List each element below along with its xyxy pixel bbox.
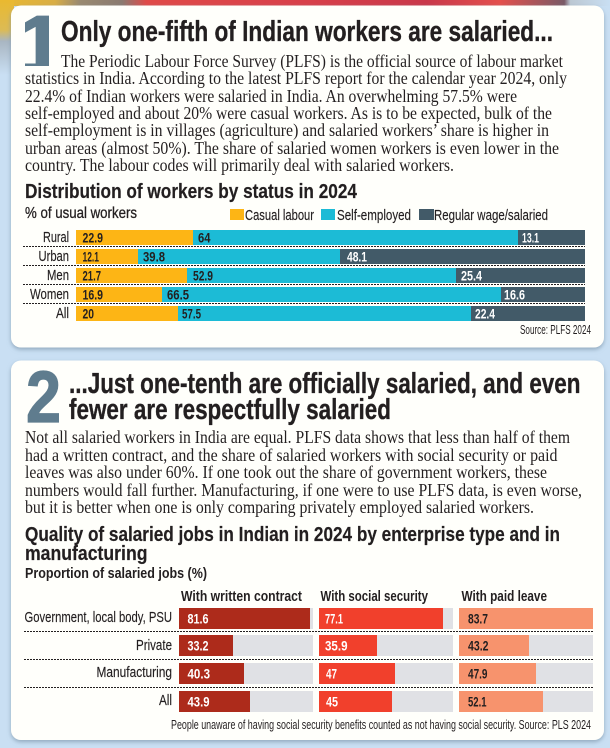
chart title 2 [25,523,560,565]
row: Urban: 48.1 [347,248,367,264]
row: Government, local body, PSU: 77.1 [325,610,343,626]
row: Private: 33.2 [188,638,209,654]
heading 2 [69,368,580,426]
row: Rural [43,229,585,246]
row: Rural: 64 [198,230,211,246]
row: Women [30,286,585,303]
intro text 1 [25,51,567,175]
row: Manufacturing: 47 [326,666,337,682]
row: Women: Women [30,286,69,303]
row: Rural: 22.9 [82,230,103,246]
heading 2: fewer are respectfully salaried [69,394,391,426]
row: All: All [56,305,69,322]
row: Manufacturing [96,663,593,684]
row: Men: Men [47,267,69,284]
row: All: 57.5 [182,306,201,322]
row: Men: 52.9 [193,268,213,284]
bar chart: column headings: With written contract [181,588,302,605]
intro text 1: 22.4% of Indian workers were salaried in India. An overwhelming 57.5% were [25,86,517,106]
intro text 2 [25,427,582,517]
row: All: 20 [82,306,94,322]
row: Rural: 13.1 [522,230,539,246]
chart subtitle 1: % of usual workers [25,205,137,222]
row: Rural: Rural [43,229,69,246]
intro text 2: leaves was also under 60%. If one took out the share of government workers, these [25,462,547,482]
row: Urban [38,248,585,265]
intro text 1: country. The labour codes will primarily deal with salaried workers. [25,155,454,175]
bar chart: column headings [181,588,547,605]
panel 1 card [11,6,604,348]
bar chart: job quality [24,608,593,712]
row: All [159,691,593,712]
row: Private: 35.9 [325,638,348,654]
row: All: 22.4 [475,306,495,322]
row: Manufacturing: 40.3 [188,666,210,682]
intro text 1: self-employment is in villages (agriculture) and salaried workers’ share is higher in [25,120,549,140]
row: Women: 16.9 [82,286,103,302]
legend: Regular wage/salaried [434,207,548,224]
row: Men [47,267,585,284]
intro text 1: urban areas (almost 50%). The share of salaried women workers is even lower in the [25,138,559,158]
row: Private: 43.2 [468,638,489,654]
intro text 2: but it is better when one is only comparing privately employed salaried workers. [25,497,534,517]
row: Women: 66.5 [167,286,189,302]
row: Private [136,635,593,656]
legend: Self-employed [337,207,411,224]
row: Manufacturing: Manufacturing [96,664,172,681]
row: Urban: 12.1 [82,248,99,264]
chart title 1: Distribution of workers by status in 2024 [25,180,357,203]
stacked bar chart [23,229,585,322]
panel 1: share of salaried workers [11,0,604,348]
bar chart: column headings: With paid leave [462,588,547,605]
row: All: All [159,692,172,709]
row: Private: Private [136,637,172,654]
row: Government, local body, PSU [24,608,593,629]
bar chart: column headings: With social security [320,588,428,605]
row: Urban: 39.8 [143,248,165,264]
row: Urban: Urban [38,248,69,265]
row: Men: 21.7 [82,268,101,284]
row: Government, local body, PSU: Government, local body, PSU [24,609,172,626]
panel 2 card [11,360,604,740]
row: Government, local body, PSU: 83.7 [468,610,488,626]
row: All [56,305,585,322]
row: Women: 16.6 [504,286,525,302]
intro text 2: had a written contract, and the share of salaried workers with social security or paid [25,445,558,465]
panel 2: quality of salaried jobs [11,357,604,740]
row: All: 45 [326,694,338,710]
legend: Casual labour [245,207,314,224]
intro text 1: self-employed and about 20% were casual workers. As is to be expected, bulk of the [25,103,552,123]
chart title 2: manufacturing [25,542,148,565]
row: All: 52.1 [468,694,487,710]
row: Men: 25.4 [461,268,482,284]
chart subtitle 2: Proportion of salaried jobs (%) [25,565,207,582]
row: Manufacturing: 47.9 [468,666,488,682]
row: Government, local body, PSU: 81.6 [188,610,209,626]
number 1: 1 [14,0,66,90]
number 2: 2 [26,357,61,438]
legend [230,207,548,224]
row: All: 43.9 [188,694,210,710]
